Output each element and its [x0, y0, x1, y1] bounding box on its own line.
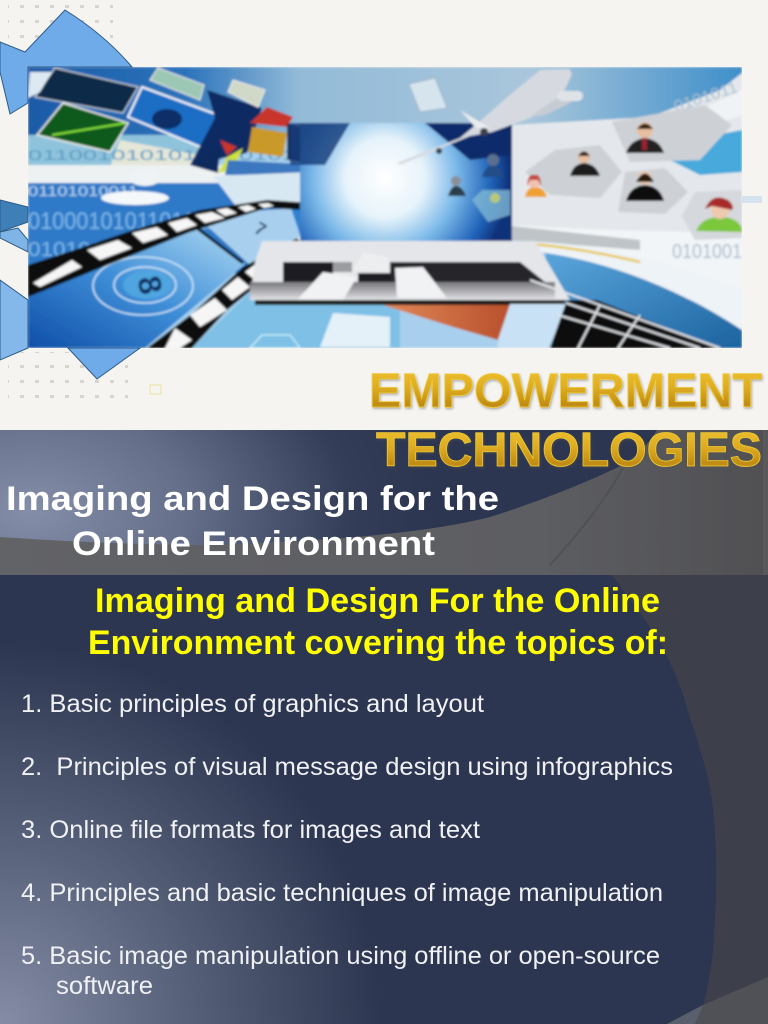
binary digits on right panel: 0101011 — [672, 79, 740, 116]
hand holding laptop — [383, 305, 510, 340]
frame number 8: 8 — [131, 273, 169, 297]
yellow heading: Environment covering the topics of: — [88, 624, 668, 662]
yellow heading — [88, 582, 668, 662]
subtitle: Imaging and Design for the — [6, 480, 499, 518]
small placeholder box — [150, 385, 161, 394]
envelopes on laptop — [297, 272, 357, 300]
subtitle: Online Environment — [72, 525, 435, 563]
upper dark panel — [0, 430, 768, 575]
binary digit bands — [28, 148, 288, 258]
aircraft — [397, 69, 584, 165]
film strip lower — [146, 237, 300, 348]
cloud shapes and ship — [101, 191, 169, 205]
grey swoosh — [0, 430, 768, 575]
topic list: software — [56, 972, 153, 1000]
film strip upper — [28, 200, 340, 297]
binary digit bands: 01101010011 — [28, 183, 138, 200]
binary digits on right panel — [672, 79, 742, 263]
title — [369, 365, 762, 477]
flying photo thumbnails — [28, 68, 320, 175]
film frame 7 — [206, 206, 302, 266]
topic list: 5. Basic image manipulation using offline or open-source — [21, 942, 660, 970]
bottom envelope — [320, 313, 390, 347]
person icons — [448, 122, 742, 232]
laptop base with keyboard — [250, 241, 570, 305]
top white banner background — [0, 0, 768, 430]
light frame at bottom — [190, 293, 401, 348]
binary digits on right panel: 0101001 — [672, 241, 742, 263]
binary digit bands: 0100010101101011 — [28, 208, 218, 235]
decorative blue diamonds on left — [0, 10, 140, 379]
film frame 8 — [28, 228, 245, 348]
collage background — [146, 136, 726, 348]
dark suit sleeve with staff lines — [550, 300, 717, 348]
laptop screen with globe — [300, 123, 512, 241]
title: EMPOWERMENT — [369, 365, 762, 418]
lower right sweep — [545, 252, 742, 348]
topic list — [21, 690, 673, 1000]
hero collage image — [28, 67, 742, 348]
calculator icon — [409, 78, 447, 112]
title: TECHNOLOGIES — [376, 424, 762, 477]
faint bar right of image — [742, 196, 762, 203]
hero collage image: 7 — [251, 218, 270, 240]
shirt cuff — [498, 304, 570, 348]
yellow heading: Imaging and Design For the Online — [95, 582, 660, 620]
decorative dot texture — [8, 3, 128, 400]
topic list: 1. Basic principles of graphics and layout — [21, 690, 484, 718]
right network panel — [512, 73, 742, 240]
topic list: 4. Principles and basic techniques of image manipulation — [21, 879, 663, 907]
lower dark panel — [0, 575, 768, 1024]
binary digit bands: 01100101010100101011 — [28, 147, 308, 164]
topic list: 2. Principles of visual message design using infographics — [21, 753, 673, 781]
hexagon tiles — [525, 105, 742, 240]
grey right arc — [612, 575, 768, 1024]
subtitle — [6, 480, 499, 563]
topic list: 3. Online file formats for images and text — [21, 816, 480, 844]
binary digit bands: 010101 — [28, 239, 103, 261]
